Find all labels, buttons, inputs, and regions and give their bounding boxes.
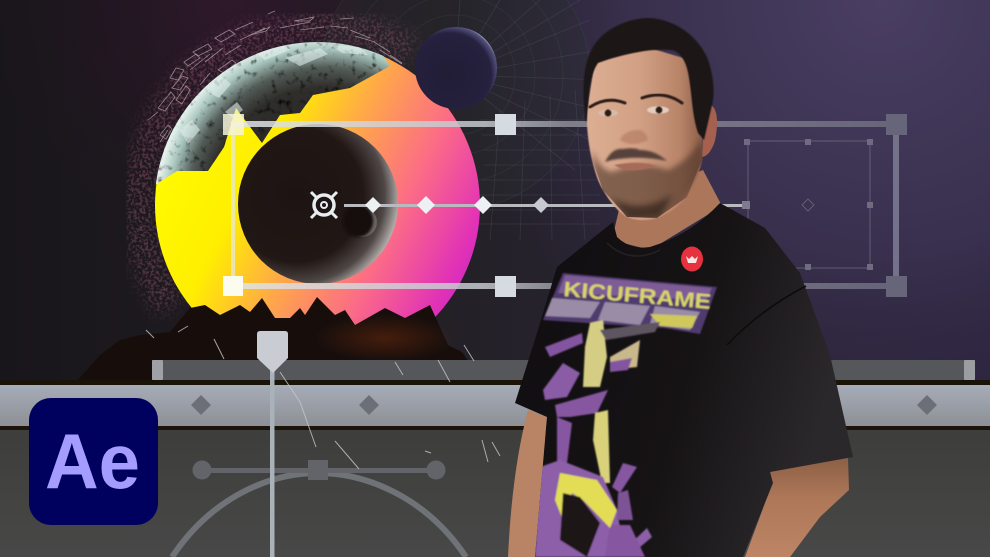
shirt print: KICUFRAME: [563, 278, 712, 314]
eyes: [598, 106, 669, 117]
t-shirt: [515, 203, 853, 557]
easing curve control: [172, 460, 466, 557]
transform frame: [223, 114, 907, 297]
After Effects logo: [29, 398, 158, 525]
scrollbar: [152, 360, 975, 380]
timeline band: [0, 380, 990, 557]
nose shading: [620, 130, 648, 144]
left arm: [508, 410, 547, 557]
neck: [612, 170, 722, 250]
planet: rocky surface: [156, 42, 390, 184]
right arm: [745, 458, 849, 557]
presenter: [508, 18, 853, 557]
planet: gradient disc: [155, 42, 480, 368]
background: [0, 0, 990, 385]
eyebrows: [590, 95, 682, 107]
keyframe diamonds: [365, 196, 549, 214]
perspective wireframe grid: [320, 0, 605, 240]
shirt print: [535, 273, 717, 557]
debris sparks: [146, 326, 500, 469]
black mountains: [76, 297, 485, 385]
moustache: [605, 148, 667, 162]
beard: [591, 140, 702, 218]
wireframe panel on the right: [744, 139, 873, 270]
planet: dusty halo: [140, 28, 410, 307]
head: [587, 45, 703, 220]
orbiting planet: [415, 27, 497, 109]
facial features: [592, 130, 704, 225]
hair: [584, 18, 714, 140]
playhead: [257, 331, 288, 557]
planet: shattered fragments: [148, 11, 402, 150]
lips: [614, 163, 656, 170]
anchor point icon: [311, 192, 337, 218]
badge: [681, 246, 703, 272]
selection handles: [223, 114, 907, 297]
After Effects logo: Ae: [45, 417, 140, 505]
ear: [702, 105, 717, 157]
dark moon: [238, 124, 398, 284]
